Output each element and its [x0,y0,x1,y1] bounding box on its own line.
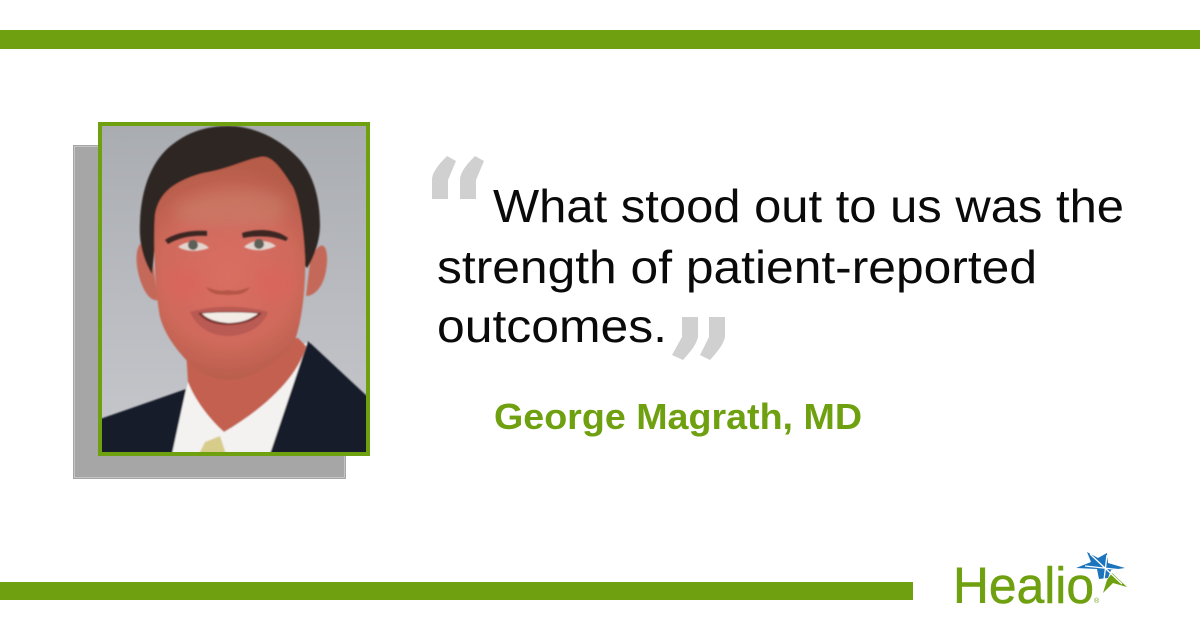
portrait photo of George Magrath [100,124,368,454]
eyes [178,241,276,251]
teeth [202,312,258,323]
quote text: strength of patient-reported [437,241,1037,293]
shirt [171,342,310,454]
mouth interior [198,312,262,325]
top green bar [0,30,1200,49]
portrait shadow panel [73,145,346,479]
opening quotation mark [432,156,484,199]
lips [190,307,268,336]
cheek shading [165,267,295,302]
hair [140,126,320,274]
logo star [1076,552,1127,593]
bottom green bar [0,582,913,600]
suit jacket [100,341,368,454]
attribution name: George Magrath, MD [494,396,862,437]
ears [136,242,327,300]
neck [186,338,306,432]
quote text [437,180,1124,352]
quote text: What stood out to us was the [493,180,1124,232]
logo wordmark: Healio [953,557,1094,614]
eyebrows [165,230,288,244]
nose shadow [206,287,250,295]
Healio logo [953,552,1127,614]
quote text: outcomes. [437,300,667,352]
closing quotation mark [672,317,725,360]
registered mark: ® [1094,597,1100,605]
tie [199,436,226,454]
face [154,157,305,380]
forehead shading [180,190,283,222]
